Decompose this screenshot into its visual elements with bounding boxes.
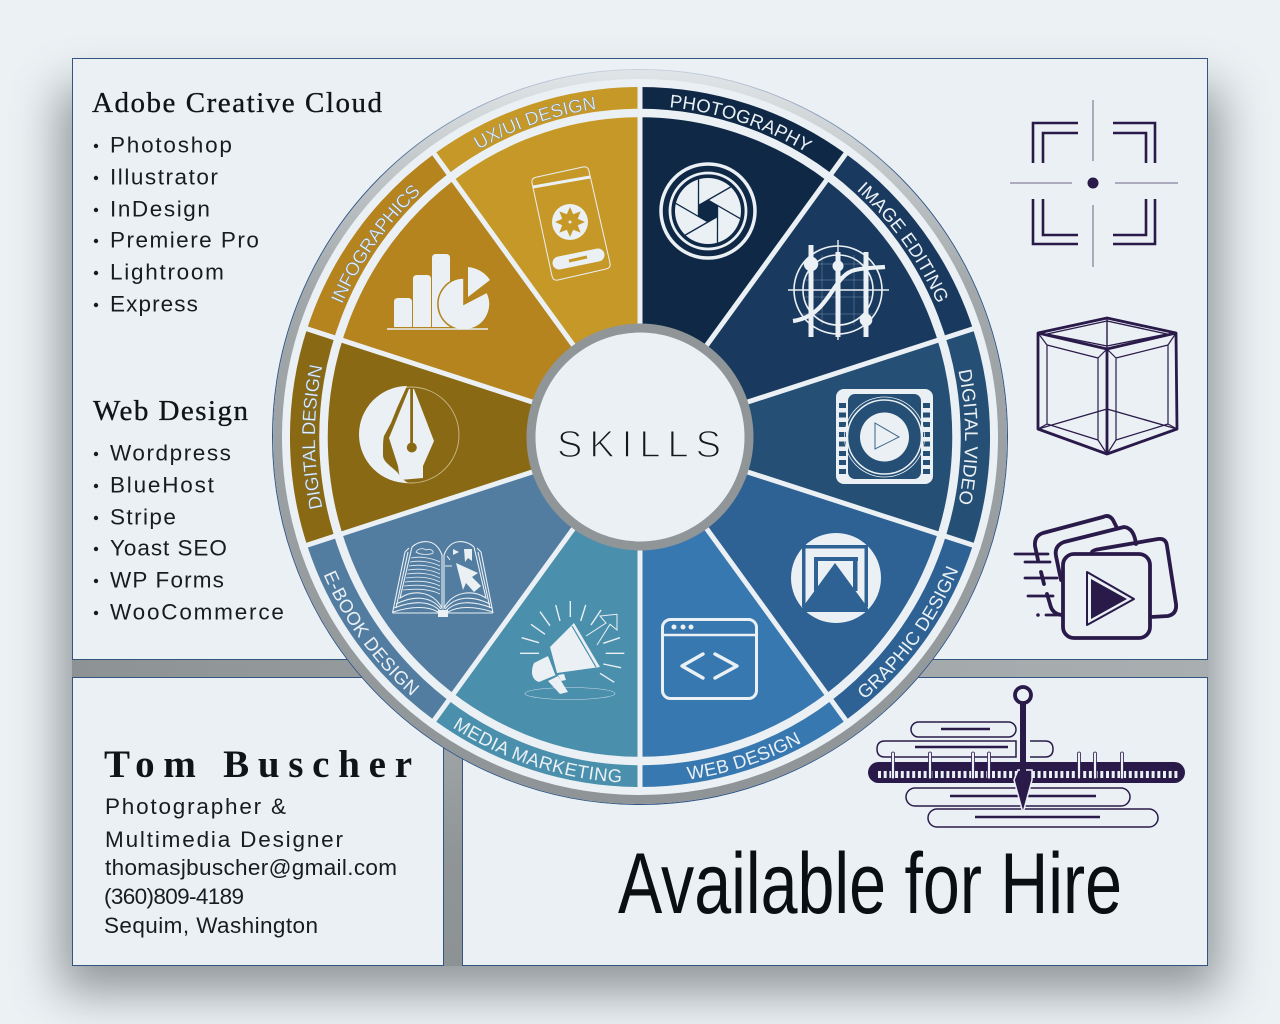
icon: video film frame	[836, 389, 933, 484]
sector: digital design	[290, 329, 640, 545]
text block: Web Design: Web Design	[93, 395, 248, 427]
sector: digital video	[640, 329, 990, 545]
panel: hire	[462, 678, 1208, 966]
sector labels: MEDIA MARKETING	[454, 717, 621, 782]
icon: e-book with cursor	[392, 542, 493, 617]
icon: sliders and curve	[788, 240, 889, 340]
text block: Web Design: Yoast SEO	[110, 536, 228, 560]
icon: video stack	[1015, 516, 1176, 638]
text block: contact details: Sequim, Washington	[104, 913, 318, 938]
icon: pen nib	[359, 386, 459, 483]
sector labels: DIGITAL VIDEO	[958, 370, 978, 504]
icon: bar and pie chart	[387, 254, 490, 330]
sector: web design	[640, 437, 846, 787]
text block: contact details: thomasjbuscher@gmail.com	[105, 855, 397, 880]
sector: photography	[640, 87, 846, 437]
text block: Web Design: BlueHost	[110, 472, 215, 498]
text block: Web Design	[93, 395, 285, 624]
sector: e-book design	[307, 437, 640, 720]
text block: contact details: Multimedia Designer	[105, 827, 344, 852]
sector labels: INFOGRAPHICS	[331, 185, 419, 304]
text block: contact details	[104, 743, 412, 938]
text block: contact details: Tom Buscher	[104, 743, 412, 786]
text block: Adobe Creative Cloud: Lightroom	[110, 260, 225, 284]
text block: Adobe Creative Cloud	[92, 87, 382, 316]
sector labels: DIGITAL DESIGN	[302, 364, 322, 510]
sector: image editing	[640, 154, 973, 437]
icon: graphic design frame	[791, 533, 881, 623]
text block: Web Design: WP Forms	[110, 568, 225, 592]
text block: Adobe Creative Cloud: Illustrator	[110, 164, 219, 190]
sector labels: IMAGE EDITING	[858, 182, 948, 302]
icon: megaphone	[520, 601, 624, 700]
sector labels: E-BOOK DESIGN	[324, 570, 420, 696]
heading: Available for Hire: Available for Hire	[618, 836, 1122, 932]
wheel center	[531, 328, 749, 546]
icon: wireframe cube	[1038, 318, 1177, 454]
icon: camera aperture	[661, 164, 755, 258]
sector labels: PHOTOGRAPHY	[670, 94, 813, 150]
icon: ruler and needle	[868, 687, 1185, 827]
sector: media marketing	[434, 437, 640, 787]
text block: contact details: (360)809-4189	[104, 884, 244, 909]
text block: Adobe Creative Cloud: Photoshop	[110, 132, 233, 158]
sector: graphic design	[640, 437, 973, 720]
gap between upper and lower panels	[72, 660, 1208, 966]
text block: contact details: Photographer &	[105, 794, 286, 819]
sector labels: GRAPHIC DESIGN	[858, 566, 958, 697]
icon: browser code window	[662, 620, 756, 698]
sector: infographics	[307, 154, 640, 437]
wheel: skills	[272, 69, 1008, 805]
text block: Web Design: WooCommerce	[110, 600, 285, 624]
icon: mobile phone app	[532, 167, 610, 280]
text block: Web Design: Wordpress	[110, 440, 232, 466]
icon: viewfinder	[1010, 100, 1178, 267]
text block: Adobe Creative Cloud: Express	[110, 292, 199, 316]
sector labels	[302, 94, 978, 782]
sector labels: WEB DESIGN	[686, 732, 800, 780]
sector: ux/ui design	[434, 87, 640, 437]
text block: Adobe Creative Cloud: Premiere Pro	[110, 228, 260, 252]
sector labels: UX/UI DESIGN	[473, 96, 596, 148]
text block: Adobe Creative Cloud: Adobe Creative Cloud	[92, 87, 382, 119]
panel: contact	[72, 678, 444, 966]
panel: top	[72, 58, 1208, 660]
heading: SKILLS: SKILLS	[557, 424, 721, 466]
text block: Web Design: Stripe	[110, 504, 177, 530]
text block: Adobe Creative Cloud: InDesign	[110, 196, 211, 222]
